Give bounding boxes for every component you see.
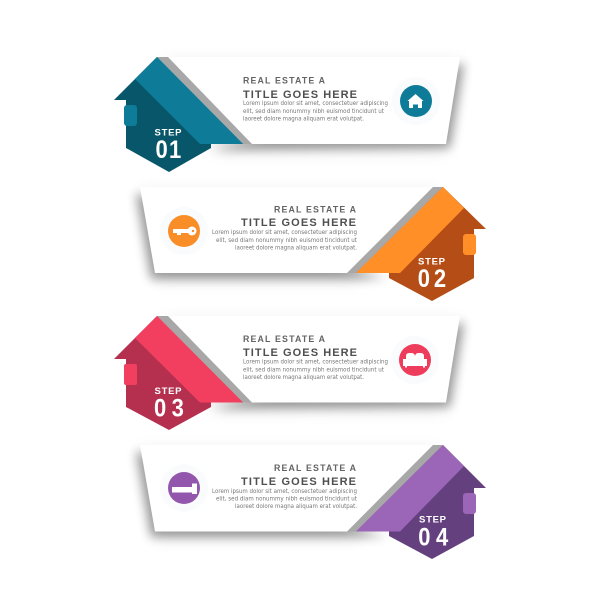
roof band [356, 445, 464, 532]
house body [114, 57, 243, 172]
description: laoreet dolore magna aliquam erat volutpat. [235, 504, 357, 510]
description: laoreet dolore magna aliquam erat volutpat. [243, 375, 364, 381]
description [243, 101, 388, 122]
card body [160, 316, 460, 402]
description: elit, sed diam nonummy nibh euismod tincidunt ut [243, 109, 385, 115]
description: Lorem ipsum dolor sit amet, consectetuer adipiscing [243, 101, 388, 107]
step label: STEP [418, 256, 446, 268]
house body [356, 445, 486, 559]
card body [140, 445, 440, 532]
house window [124, 364, 137, 385]
title: TITLE GOES HERE [241, 476, 356, 488]
grey roof edge [347, 187, 443, 273]
house body [114, 316, 243, 430]
step label: STEP [154, 386, 182, 397]
step number: 02 [418, 265, 446, 292]
icon: bed [160, 464, 208, 512]
panel: step 3 [114, 316, 464, 430]
description: Lorem ipsum dolor sit amet, consectetuer adipiscing [243, 360, 388, 366]
step number: 04 [418, 523, 448, 551]
title: TITLE GOES HERE [241, 217, 356, 229]
card body [160, 57, 460, 144]
kicker: REAL ESTATE A [243, 334, 326, 344]
card body [140, 187, 440, 273]
house window [463, 493, 476, 514]
kicker: REAL ESTATE A [243, 76, 326, 86]
step number: 01 [155, 136, 181, 163]
card shadow [136, 450, 440, 538]
description [243, 360, 388, 381]
house window [124, 105, 137, 126]
kicker: REAL ESTATE A [274, 463, 357, 473]
grey roof edge [157, 57, 252, 144]
description: laoreet dolore magna aliquam erat volutpat. [243, 116, 364, 122]
step label: STEP [154, 128, 182, 138]
roof band [356, 187, 464, 273]
description [212, 230, 358, 252]
description: Lorem ipsum dolor sit amet, consectetuer adipiscing [212, 489, 357, 495]
description: elit, sed diam nonummy nibh euismod tincidunt ut [243, 368, 385, 374]
kicker: REAL ESTATE A [274, 204, 357, 214]
house body [356, 187, 486, 301]
panel: step 2 [136, 187, 486, 301]
icon: key [160, 207, 208, 255]
description: Lorem ipsum dolor sit amet, consectetuer adipiscing [212, 230, 357, 236]
card shadow [136, 192, 440, 280]
title: TITLE GOES HERE [243, 89, 357, 101]
description: elit, sed diam nonummy nibh euismod tincidunt ut [216, 496, 358, 502]
house window [463, 234, 476, 255]
grey roof edge [347, 445, 443, 532]
step label: STEP [419, 514, 447, 526]
description: elit, sed diam nonummy nibh euismod tincidunt ut [216, 238, 358, 244]
title: TITLE GOES HERE [243, 347, 357, 359]
roof band [135, 57, 243, 144]
icon: sofa [391, 336, 439, 384]
description [212, 489, 358, 510]
grey roof edge [157, 316, 252, 402]
card shadow [160, 62, 464, 151]
panel: step 1 [114, 57, 464, 172]
card shadow [160, 321, 464, 410]
panel: step 4 [136, 445, 486, 559]
roof band [135, 316, 243, 402]
step number: 03 [154, 394, 184, 422]
icon: house [392, 77, 440, 125]
description: laoreet dolore magna aliquam erat volutpat. [235, 246, 357, 252]
